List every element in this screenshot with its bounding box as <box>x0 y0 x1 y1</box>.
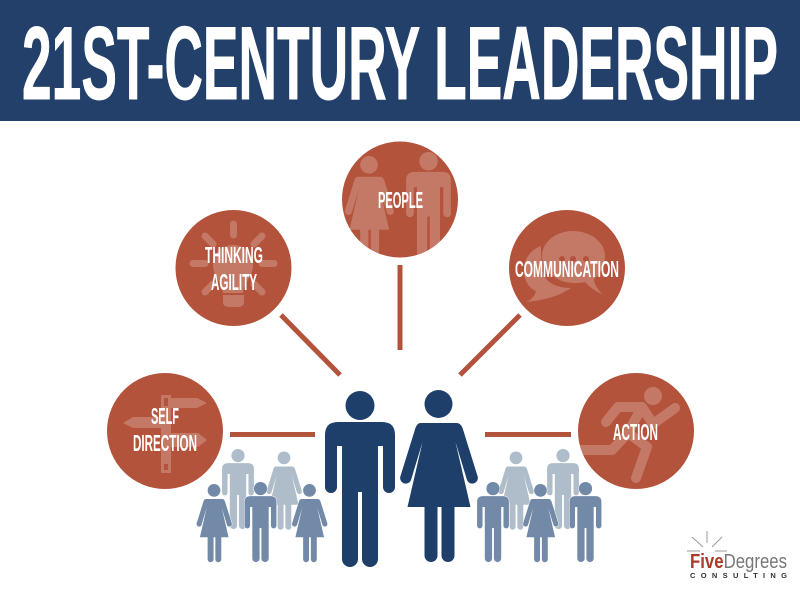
connector: communication <box>460 315 520 375</box>
leader: woman <box>400 390 478 562</box>
icon: signpost <box>123 395 207 473</box>
circle: communication <box>509 210 625 326</box>
label: self direction <box>133 403 197 456</box>
circle: self direction <box>107 373 223 489</box>
icon: speech dots <box>559 256 589 262</box>
label: thinking agility: THINKING <box>205 242 263 268</box>
group: right team front row <box>477 482 601 562</box>
group: left team back row <box>222 449 302 530</box>
icon: speech bubbles <box>524 231 605 302</box>
circle: people <box>342 142 458 265</box>
leader: man <box>325 391 395 567</box>
icon: woman and man <box>345 152 451 265</box>
label: action: ACTION <box>613 419 658 445</box>
circle: thinking agility <box>176 210 292 326</box>
connector: self direction <box>230 432 315 437</box>
connector: thinking agility <box>281 315 340 375</box>
circle: people: PEOPLE <box>378 187 423 213</box>
label: thinking agility <box>205 242 263 295</box>
circle: action <box>575 373 694 489</box>
logo: Five Degrees Consulting <box>687 531 787 580</box>
logo rays <box>687 531 727 551</box>
title banner <box>0 0 800 121</box>
label: self direction: SELF <box>151 403 179 429</box>
logo tagline: CONSULTING <box>690 571 787 580</box>
connector: action <box>485 432 571 437</box>
label: thinking agility: AGILITY <box>211 269 257 295</box>
connector: people <box>398 265 402 350</box>
icon: running figure <box>575 387 675 478</box>
logo wordmark: FiveDegrees <box>690 551 787 573</box>
icon: light bulb <box>193 224 274 307</box>
label: communication: COMMUNICATION <box>515 256 619 282</box>
label: self direction: DIRECTION <box>133 430 197 456</box>
group: left team front row <box>197 482 327 562</box>
group: right team back row <box>499 449 579 530</box>
